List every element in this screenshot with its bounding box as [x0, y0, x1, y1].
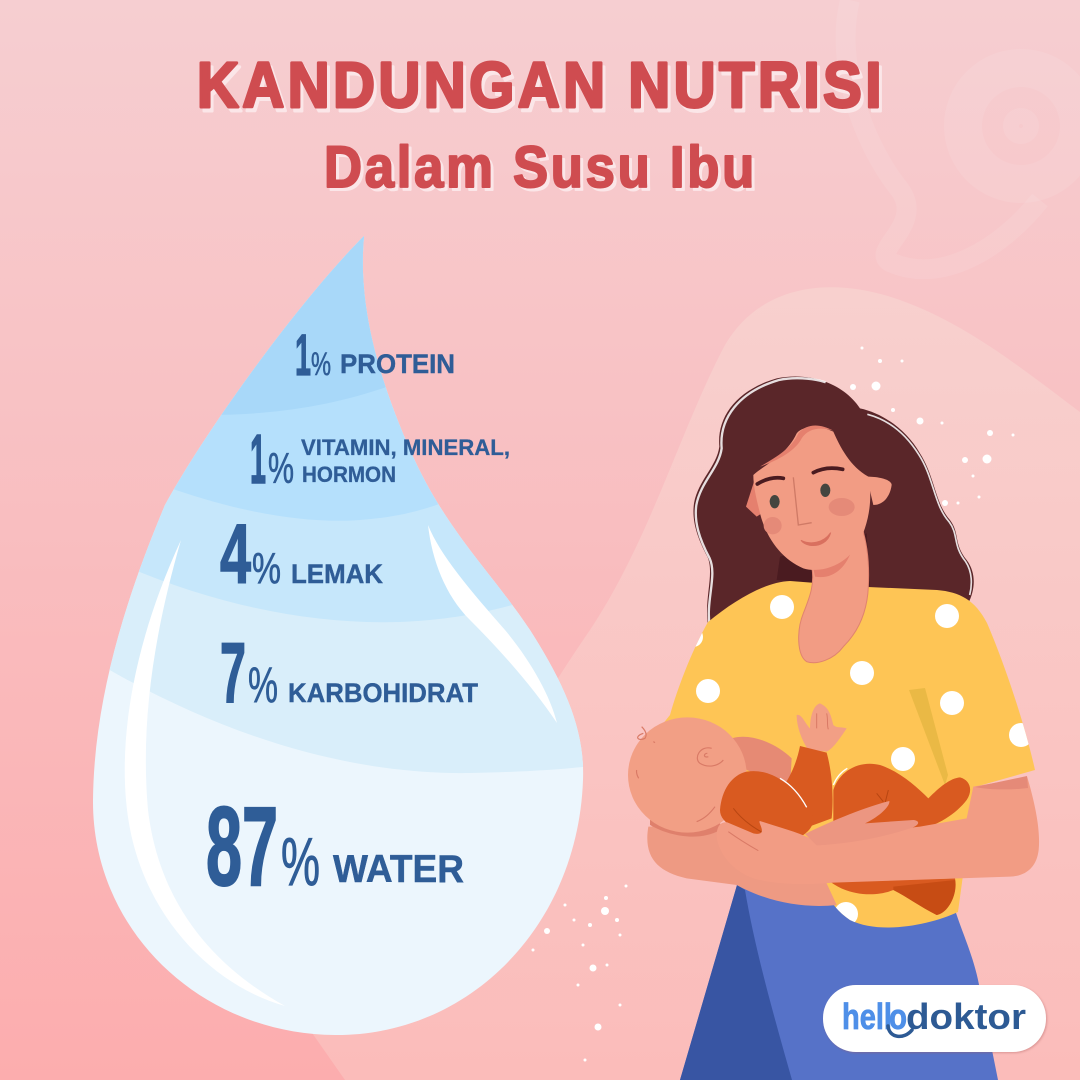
label: lemak: [220, 507, 383, 601]
logo: doktor: [906, 996, 1026, 1037]
label: water: %: [281, 824, 320, 900]
title: KANDUNGAN NUTRISI: [200, 53, 888, 125]
shirt fold: [909, 688, 948, 785]
near arm: [717, 777, 1039, 884]
band: lemak: [139, 393, 512, 622]
baby torso: [720, 771, 813, 840]
brows: [757, 478, 783, 484]
baby head: [628, 717, 747, 833]
logo: hell: [842, 996, 892, 1037]
subtitle: Dalam Susu Ibu: [327, 138, 760, 203]
shirt: [650, 581, 1035, 928]
label: protein: PROTEIN: [340, 349, 455, 379]
label: protein: 1: [295, 323, 311, 388]
logo: o: [889, 996, 907, 1037]
band: karbohidrat: [110, 508, 583, 773]
baby neck shoulder: [732, 737, 792, 787]
label: vitamin: VITAMIN, MINERAL,: [301, 435, 510, 460]
background blob: [310, 287, 1080, 1080]
label: karbohidrat: [220, 626, 478, 721]
label: vitamin: [250, 420, 510, 498]
ear: [867, 477, 892, 505]
sleeve shadow: [975, 776, 1028, 789]
label: protein: [295, 323, 455, 388]
label: vitamin: HORMON: [302, 462, 396, 487]
far arm and baby: [628, 703, 1039, 915]
skirt: [680, 885, 998, 1080]
sparkle dots lower: [532, 884, 628, 1062]
illustration: mother and baby: [628, 376, 1039, 1080]
drop highlight left: [125, 540, 285, 1006]
label: protein: %: [311, 346, 331, 382]
face and neck: [746, 425, 892, 663]
label: karbohidrat: %: [248, 657, 278, 713]
band: vitamin: [174, 236, 438, 521]
drop highlight right: [428, 525, 557, 723]
label: water: WATER: [333, 848, 464, 891]
baby arm sleeve: [783, 746, 833, 830]
title: KANDUNGAN NUTRISI: [197, 49, 885, 121]
eyes: [770, 495, 780, 508]
cheeks: [764, 517, 782, 534]
label: lemak: LEMAK: [291, 559, 383, 589]
shirt dots: [683, 595, 1033, 926]
baby hand: [797, 703, 847, 752]
mouth: [801, 533, 831, 546]
sparkle dots upper: [850, 346, 1014, 506]
label: vitamin: 1: [250, 420, 266, 498]
baby leg upper: [833, 764, 970, 830]
hair: [693, 376, 974, 627]
label: vitamin: %: [268, 445, 294, 493]
label: lemak: %: [252, 544, 281, 593]
water drop chart: [93, 236, 584, 1035]
label: water: [206, 784, 464, 909]
left hairline side: [746, 473, 767, 517]
band: protein: [222, 236, 386, 415]
label: karbohidrat: KARBOHIDRAT: [288, 678, 478, 708]
far hand: [805, 801, 918, 845]
label: water: 87: [206, 784, 278, 909]
label: lemak: 4: [220, 507, 251, 601]
nose: [793, 477, 812, 525]
decorative stethoscope watermark: [846, 0, 1079, 269]
logo: [823, 985, 1046, 1052]
baby leg lower: [830, 878, 956, 915]
subtitle: Dalam Susu Ibu: [324, 135, 757, 200]
label: karbohidrat: 7: [220, 626, 246, 721]
face shape: [753, 427, 870, 570]
